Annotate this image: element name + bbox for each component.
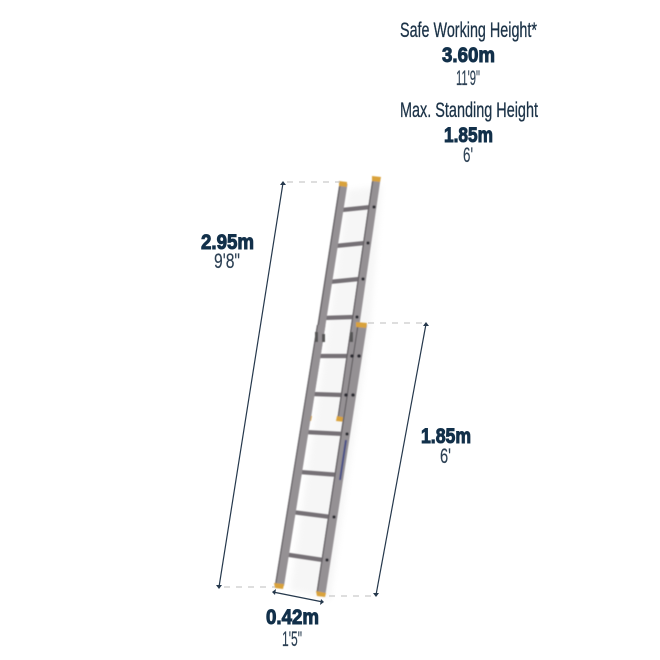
dimension: overall height 2.95m: [201, 181, 340, 589]
label: 2.95m: 2.95m: [201, 231, 254, 254]
ladder shadow: [290, 186, 382, 600]
upper feet: [302, 416, 312, 421]
lower ladder section: [274, 322, 367, 597]
value: 6': 6': [463, 144, 473, 167]
arrow: [273, 592, 323, 602]
hook brackets and bolts: [315, 205, 376, 562]
label: 6': 6': [440, 445, 451, 468]
label: 0.42m: 0.42m: [266, 606, 319, 629]
value: 1.85m: 1.85m: [444, 124, 493, 147]
value: 3.60m: 3.60m: [442, 44, 495, 67]
label: safe working height: Safe Working Height*: [400, 19, 537, 42]
top caps: [339, 181, 347, 187]
upper ladder section: [302, 176, 381, 422]
arrow: [219, 183, 283, 587]
lower section top cap: [356, 322, 367, 328]
value: 11'9": 11'9": [456, 67, 480, 90]
dimension: closed height 1.85m: [329, 322, 471, 597]
dimension: width 0.42m: [266, 589, 324, 651]
heading block: max standing height: [400, 99, 538, 167]
label: 9'8": 9'8": [214, 250, 240, 273]
rungs: [283, 207, 371, 560]
dashed guides: [224, 182, 340, 587]
ladder illustration: [274, 176, 382, 600]
dashed guides: [329, 323, 424, 596]
ladder body: [274, 176, 381, 597]
arrow: [376, 324, 426, 595]
label: max standing height: Max. Standing Height: [400, 99, 538, 122]
base feet: [274, 583, 284, 589]
heading block: safe working height: [400, 19, 537, 90]
label: 1'5": 1'5": [282, 628, 302, 651]
label: 1.85m: 1.85m: [421, 425, 471, 448]
